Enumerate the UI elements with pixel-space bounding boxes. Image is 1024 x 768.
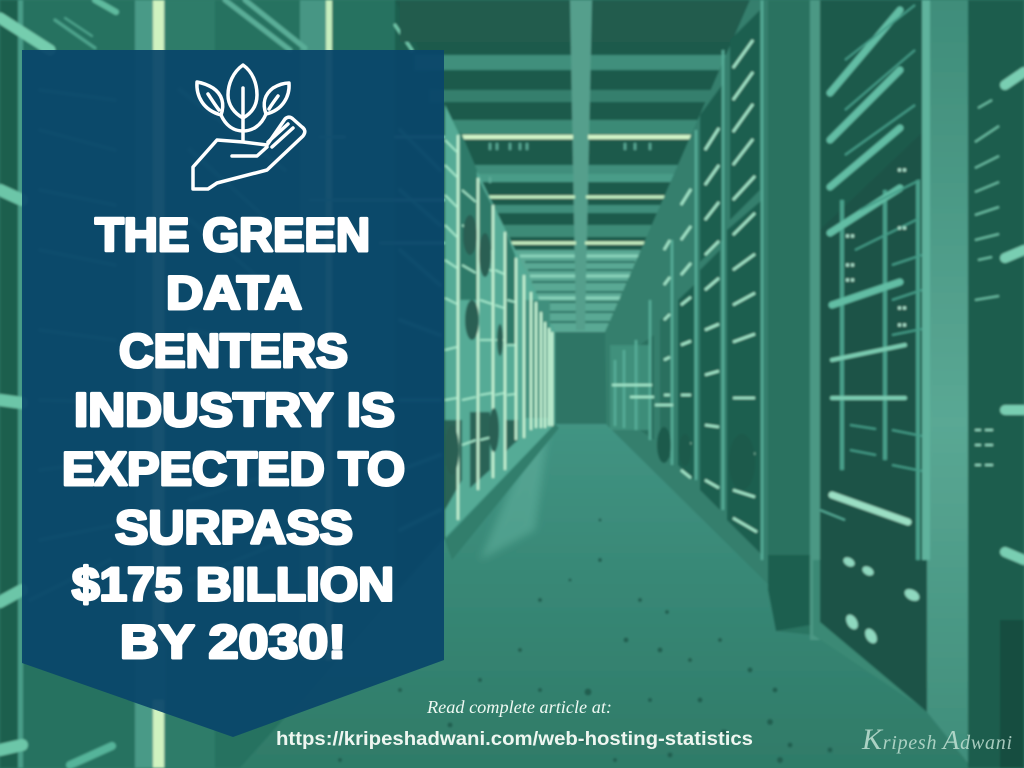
left foreground racks (0, 0, 445, 768)
corridor floor (240, 424, 1000, 768)
icon: plant growing from open hand (193, 65, 305, 189)
heading: EXPECTED TO (62, 442, 405, 495)
left corridor racks (445, 105, 555, 538)
pillar and far-right rack (922, 0, 1024, 768)
heading: SURPASS (115, 500, 353, 554)
heading: DATA (166, 266, 302, 319)
signature: Kripesh Adwani (861, 723, 1012, 756)
heading: INDUSTRY IS (74, 383, 395, 436)
read article caption: Read complete article at: (426, 697, 612, 717)
banner panel (22, 50, 444, 737)
heading: $175 BILLION (72, 558, 394, 610)
far end wall (555, 332, 605, 424)
right corridor racks (605, 0, 768, 584)
ceiling (395, 0, 770, 335)
article url: https://kripeshadwani.com/web-hosting-statistics (276, 729, 753, 750)
heading: THE GREEN (95, 208, 370, 261)
right foreground pillar (768, 0, 820, 640)
heading (62, 208, 405, 668)
right foreground rack (813, 0, 1024, 768)
heading: BY 2030! (120, 615, 346, 668)
heading: CENTERS (119, 324, 348, 377)
